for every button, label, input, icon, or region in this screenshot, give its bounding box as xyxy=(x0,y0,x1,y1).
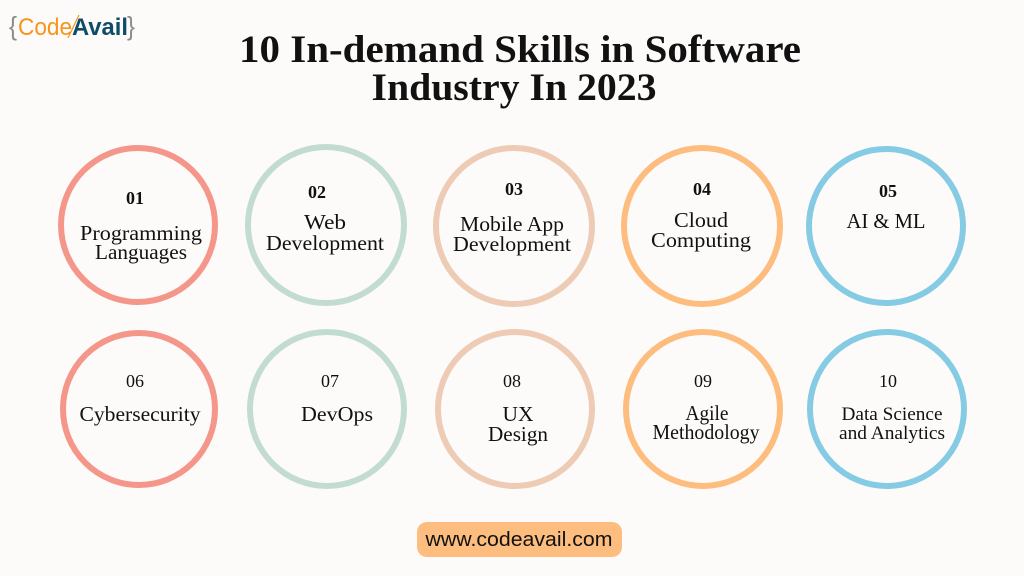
skill 04: Cloud xyxy=(674,208,729,232)
title: 10 In-demand Skills in Software xyxy=(239,28,801,71)
skill 04: Computing xyxy=(651,228,752,252)
title: Industry In 2023 xyxy=(372,66,656,109)
skill 08 xyxy=(438,332,592,486)
logo: CodeAvail: Avail xyxy=(72,14,128,41)
skill 07: DevOps xyxy=(301,402,373,426)
skill 01: 01 xyxy=(126,188,144,208)
skill 04: 04 xyxy=(693,179,711,199)
skill 05: AI & ML xyxy=(846,209,926,233)
logo: CodeAvail: { xyxy=(9,11,17,41)
title xyxy=(239,28,801,109)
skill 09: Methodology xyxy=(652,420,760,444)
skill 05: 05 xyxy=(879,181,897,201)
skill 05 xyxy=(809,149,963,303)
skill 06: Cybersecurity xyxy=(80,402,201,426)
logo: CodeAvail: Code xyxy=(18,14,72,41)
skill 02: Development xyxy=(266,231,384,255)
skill 10: 10 xyxy=(879,371,897,391)
skill 04 xyxy=(624,148,780,304)
skill 10: Data Science xyxy=(842,404,942,425)
skill 06: 06 xyxy=(126,371,144,391)
skill 03: Development xyxy=(453,232,571,256)
skill 10: and Analytics xyxy=(839,423,945,444)
website badge xyxy=(417,522,622,557)
skill 03 xyxy=(436,148,592,304)
skill 08: Design xyxy=(488,422,548,446)
skill 09: Agile xyxy=(686,401,728,425)
logo: CodeAvail xyxy=(9,11,135,41)
skill 09: 09 xyxy=(694,371,712,391)
skill 08: 08 xyxy=(503,371,521,391)
skill 02 xyxy=(248,147,404,303)
skill 01: Languages xyxy=(95,240,187,264)
skill 02: Web xyxy=(304,210,346,234)
skill 08: UX xyxy=(502,402,534,426)
skill 07: 07 xyxy=(321,371,339,391)
skill 03: Mobile App xyxy=(460,212,564,236)
website badge: www.codeavail.com xyxy=(424,529,612,551)
skill 01: Programming xyxy=(80,221,203,245)
skill 09 xyxy=(626,332,780,486)
skill 01 xyxy=(61,148,215,302)
skill 02: 02 xyxy=(308,182,326,202)
logo: CodeAvail: } xyxy=(127,11,135,41)
skill 07 xyxy=(250,332,404,486)
skill 10 xyxy=(810,332,964,486)
skill 06 xyxy=(63,333,215,485)
skill 03: 03 xyxy=(505,179,523,199)
